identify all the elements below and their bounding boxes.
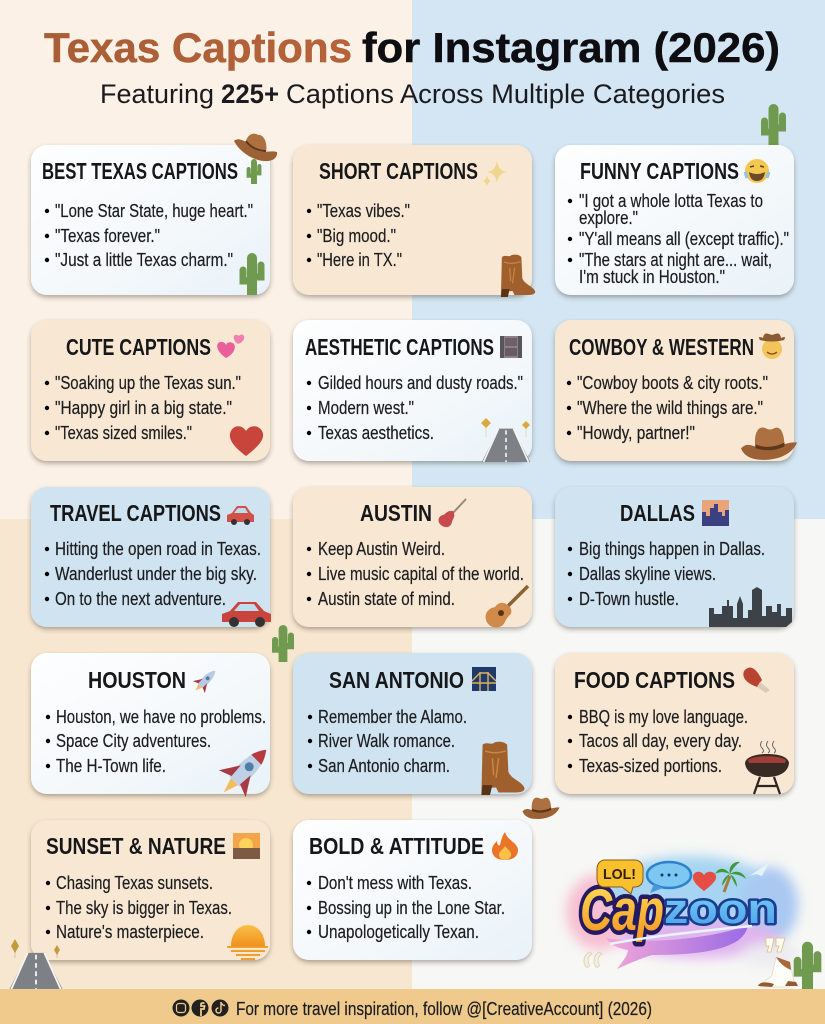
- caption list: Don't mess with Texas.: [318, 873, 472, 893]
- icon: car emoji: [227, 506, 254, 525]
- panel: short captions: [293, 145, 535, 297]
- panel: austin: [293, 487, 532, 627]
- caption list: "Soaking up the Texas sun.": [55, 373, 241, 393]
- icon: cowboy hat on card corner: [234, 134, 277, 161]
- logo cloud: [566, 856, 800, 967]
- heading: COWBOY & WESTERN: [569, 334, 754, 360]
- caption list: "Where the wild things are.": [577, 398, 763, 418]
- icon: city at dusk: [702, 500, 729, 526]
- caption list: I'm stuck in Houston.": [579, 267, 725, 287]
- caption list: "Texas forever.": [55, 226, 160, 246]
- caption list: Austin state of mind.: [318, 589, 455, 609]
- icon: bridge at night: [472, 667, 496, 691]
- caption list: [307, 373, 523, 443]
- icon: sparkles: [483, 160, 507, 186]
- caption list: [45, 373, 241, 443]
- heading: DALLAS: [620, 500, 695, 526]
- heading: AUSTIN: [360, 500, 432, 526]
- caption list: "The stars at night are... wait,: [579, 250, 772, 270]
- logo wordmark: zoon: [664, 885, 777, 932]
- heart: [693, 872, 716, 891]
- panel: bold and attitude: [293, 820, 532, 960]
- logo wordmark: Cap: [580, 878, 664, 943]
- icon: boot: [501, 255, 535, 297]
- background: white bottom right: [412, 519, 825, 990]
- caption list: The H-Town life.: [56, 756, 166, 776]
- caption list: On to the next adventure.: [55, 589, 226, 609]
- icon: road bottom left: [9, 939, 63, 990]
- icon: two hearts: [217, 334, 244, 358]
- icon: cactus bottom right: [798, 947, 817, 988]
- caption list: "Happy girl in a big state.": [55, 398, 232, 418]
- caption list: D-Town hustle.: [579, 589, 679, 609]
- caption list: Houston, we have no problems.: [56, 707, 266, 727]
- caption list: [308, 707, 467, 776]
- caption list: [568, 539, 765, 609]
- quote marks left: [584, 952, 602, 967]
- logo wordmark: [580, 878, 777, 943]
- caption list: Nature's masterpiece.: [56, 922, 204, 942]
- panel: houston: [31, 653, 280, 806]
- caption list: "Texas vibes.": [317, 201, 410, 221]
- caption list: "Lone Star State, huge heart.": [55, 201, 253, 221]
- icon: dallas skyline: [709, 587, 792, 627]
- icon: cactus top right: [764, 109, 782, 146]
- caption list: [46, 873, 232, 942]
- caption list: "Y'all means all (except traffic).": [579, 229, 789, 249]
- caption list: Space City adventures.: [56, 731, 211, 751]
- caption list: Chasing Texas sunsets.: [56, 873, 213, 893]
- panel: food captions: [555, 653, 794, 794]
- icon: red car: [222, 602, 271, 627]
- icon: acoustic guitar: [486, 586, 528, 627]
- heading: FOOD CAPTIONS: [574, 667, 735, 693]
- subtitle: Featuring: [100, 79, 214, 109]
- icon: cactus between cards: [275, 629, 291, 662]
- icon: cowboy hat: [741, 427, 797, 460]
- caption list: Remember the Alamo.: [318, 707, 467, 727]
- panel: dallas: [555, 487, 794, 627]
- caption list: "Texas sized smiles.": [55, 423, 192, 443]
- social icons: [172, 1000, 228, 1016]
- heading: SUNSET & NATURE: [46, 833, 226, 859]
- caption list: "Cowboy boots & city roots.": [577, 373, 768, 393]
- caption list: Dallas skyline views.: [579, 564, 716, 584]
- icon: road with signs: [481, 418, 530, 462]
- palm tree: [715, 862, 746, 892]
- plane: [749, 863, 769, 876]
- caption list: Texas aesthetics.: [318, 423, 434, 443]
- caption list: Live music capital of the world.: [318, 564, 524, 584]
- icon: sunset emoji: [233, 833, 260, 859]
- heading: SHORT CAPTIONS: [319, 158, 478, 184]
- title: Texas Captions: [44, 24, 352, 71]
- heading: AESTHETIC CAPTIONS: [305, 334, 494, 360]
- panel: travel captions: [31, 487, 271, 627]
- caption list: Texas-sized portions.: [579, 756, 722, 776]
- caption list: Gilded hours and dusty roads.": [318, 373, 523, 393]
- subtitle: Captions Across Multiple Categories: [286, 79, 725, 109]
- heading: TRAVEL CAPTIONS: [50, 500, 221, 526]
- icon: fire: [492, 832, 518, 860]
- caption list: "Big mood.": [317, 226, 396, 246]
- caption list: Big things happen in Dallas.: [579, 539, 765, 559]
- caption list: [567, 373, 768, 443]
- caption list: Keep Austin Weird.: [318, 539, 445, 559]
- title: for Instagram (2026): [362, 24, 780, 71]
- logo swoosh body: [606, 925, 748, 969]
- logo underline stroke: [610, 926, 752, 944]
- caption list: [46, 707, 266, 776]
- quote marks right: [766, 938, 785, 952]
- background: blue top right: [412, 0, 825, 519]
- caption list: [307, 873, 505, 942]
- caption list: Tacos all day, every day.: [579, 731, 742, 751]
- caption list: "I got a whole lotta Texas to: [579, 191, 763, 211]
- icon: cowboy face: [759, 333, 785, 359]
- background: cream top left: [0, 0, 412, 520]
- caption list: Unapologetically Texan.: [318, 922, 479, 942]
- panel: best texas captions: [31, 145, 270, 295]
- caption list: [45, 539, 261, 609]
- panel: san antonio: [293, 653, 532, 795]
- background: beige bottom left: [0, 519, 412, 990]
- caption list: [45, 201, 253, 270]
- caption list: "Just a little Texas charm.": [55, 250, 233, 270]
- heading: BOLD & ATTITUDE: [309, 833, 484, 859]
- caption list: River Walk romance.: [318, 731, 455, 751]
- caption list: Wanderlust under the big sky.: [55, 564, 257, 584]
- panel: aesthetic captions: [293, 320, 532, 462]
- icon: film strip: [500, 336, 522, 358]
- icon: cactus emoji: [249, 162, 259, 184]
- caption list: [307, 201, 410, 270]
- caption list: [568, 191, 789, 287]
- icon: cowboy hat between rows: [522, 798, 560, 819]
- subtitle: 225+: [221, 79, 279, 109]
- caption list: explore.": [579, 208, 638, 228]
- icon: rocket emoji: [189, 665, 221, 697]
- LOL bubble: [597, 860, 643, 894]
- caption list: [307, 539, 524, 609]
- caption list: Modern west.": [318, 398, 414, 418]
- subtitle: [100, 79, 725, 109]
- caption list: Bossing up in the Lone Star.: [318, 898, 505, 918]
- footer text: For more travel inspiration, follow @[CreativeAccount] (2026): [236, 999, 652, 1019]
- caption list: BBQ is my love language.: [579, 707, 748, 727]
- icon: heart: [230, 426, 263, 456]
- icon: meat on bone: [743, 668, 770, 693]
- panel: sunset and nature: [31, 820, 270, 960]
- chat bubble: [647, 862, 691, 893]
- caption list: "Here in TX.": [317, 250, 402, 270]
- icon: sun on horizon: [227, 925, 268, 959]
- icon: rocket: [210, 736, 280, 806]
- heading: SAN ANTONIO: [329, 667, 464, 693]
- heading: CUTE CAPTIONS: [66, 334, 211, 360]
- caption list: The sky is bigger in Texas.: [56, 898, 232, 918]
- heading: HOUSTON: [88, 667, 186, 693]
- icon: laughing face: [745, 159, 769, 183]
- icon: white boot bottom right: [758, 957, 798, 987]
- icon: electric guitar: [439, 499, 466, 527]
- logo: capzoon: [566, 856, 800, 969]
- icon: cactus: [243, 258, 261, 295]
- heading: BEST TEXAS CAPTIONS: [42, 158, 238, 184]
- panel: funny captions: [555, 145, 794, 295]
- caption list: "Howdy, partner!": [577, 423, 695, 443]
- caption list: San Antonio charm.: [318, 756, 450, 776]
- heading: FUNNY CAPTIONS: [580, 158, 739, 184]
- caption list: [568, 707, 748, 776]
- panel: cowboy and western: [555, 320, 797, 461]
- LOL bubble: LOL!: [603, 866, 636, 883]
- title: [44, 24, 780, 71]
- caption list: Hitting the open road in Texas.: [55, 539, 261, 559]
- panel: cute captions: [31, 320, 270, 461]
- footer bar: [0, 989, 825, 1024]
- icon: boot: [481, 742, 525, 795]
- icon: grill: [745, 741, 789, 794]
